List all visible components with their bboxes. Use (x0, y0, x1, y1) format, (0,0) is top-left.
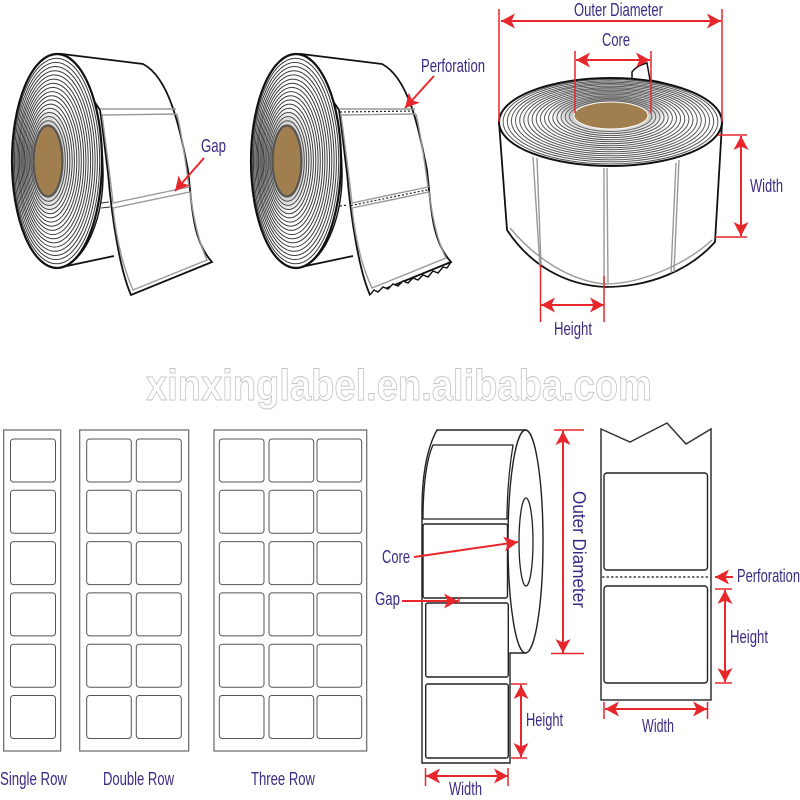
dimension: Height (540, 265, 604, 339)
dimension: Width: Width (642, 716, 674, 736)
arrow: Gap (175, 158, 204, 191)
label: Single Row: Single Row (0, 769, 68, 789)
dimension: Core (575, 30, 651, 113)
dimension: Core: Core (602, 30, 630, 50)
watermark: xinxinglabel.en.alibaba.com (146, 361, 652, 410)
dimension: Width (715, 135, 783, 237)
panel: double row strip (80, 430, 189, 789)
arrow: Perforation (405, 76, 434, 108)
dimension: Outer Diameter: Outer Diameter (574, 0, 663, 20)
dimension: Height: Height (730, 627, 768, 647)
callout: Gap (375, 589, 459, 609)
panel: single row strip (0, 430, 68, 789)
dimension: Height: Height (554, 319, 592, 339)
dimension: Outer Diameter (vertical): Outer Diameter (569, 491, 589, 608)
dimension: Width (604, 702, 708, 736)
dimension: Width: Width (750, 176, 783, 196)
label: Double Row: Double Row (103, 769, 175, 789)
dimension: Outer Diameter (499, 0, 722, 122)
diagram: roll side view with unrolled labels (375, 430, 589, 799)
diagram: roll with perforation (251, 54, 485, 300)
label: Gap: Gap (201, 136, 226, 156)
dimension: Height: Height (526, 710, 563, 730)
callout: Gap: Gap (375, 589, 400, 609)
panel: three row strip (214, 430, 367, 789)
label: Three Row: Three Row (251, 769, 316, 789)
dimension: Height (715, 589, 768, 683)
diagram: roll with gap (12, 54, 226, 295)
dimension: Outer Diameter (vertical) (551, 430, 589, 654)
callout: Core (382, 542, 518, 567)
label: Perforation: Perforation (421, 56, 485, 76)
dimension: Width: Width (449, 779, 482, 799)
diagram: roll standing upright with dimensions (499, 0, 783, 339)
dimension: Width (426, 768, 508, 799)
callout: Core: Core (382, 547, 410, 567)
dimension: Height (511, 684, 563, 758)
diagram: perforated strip (601, 423, 800, 736)
